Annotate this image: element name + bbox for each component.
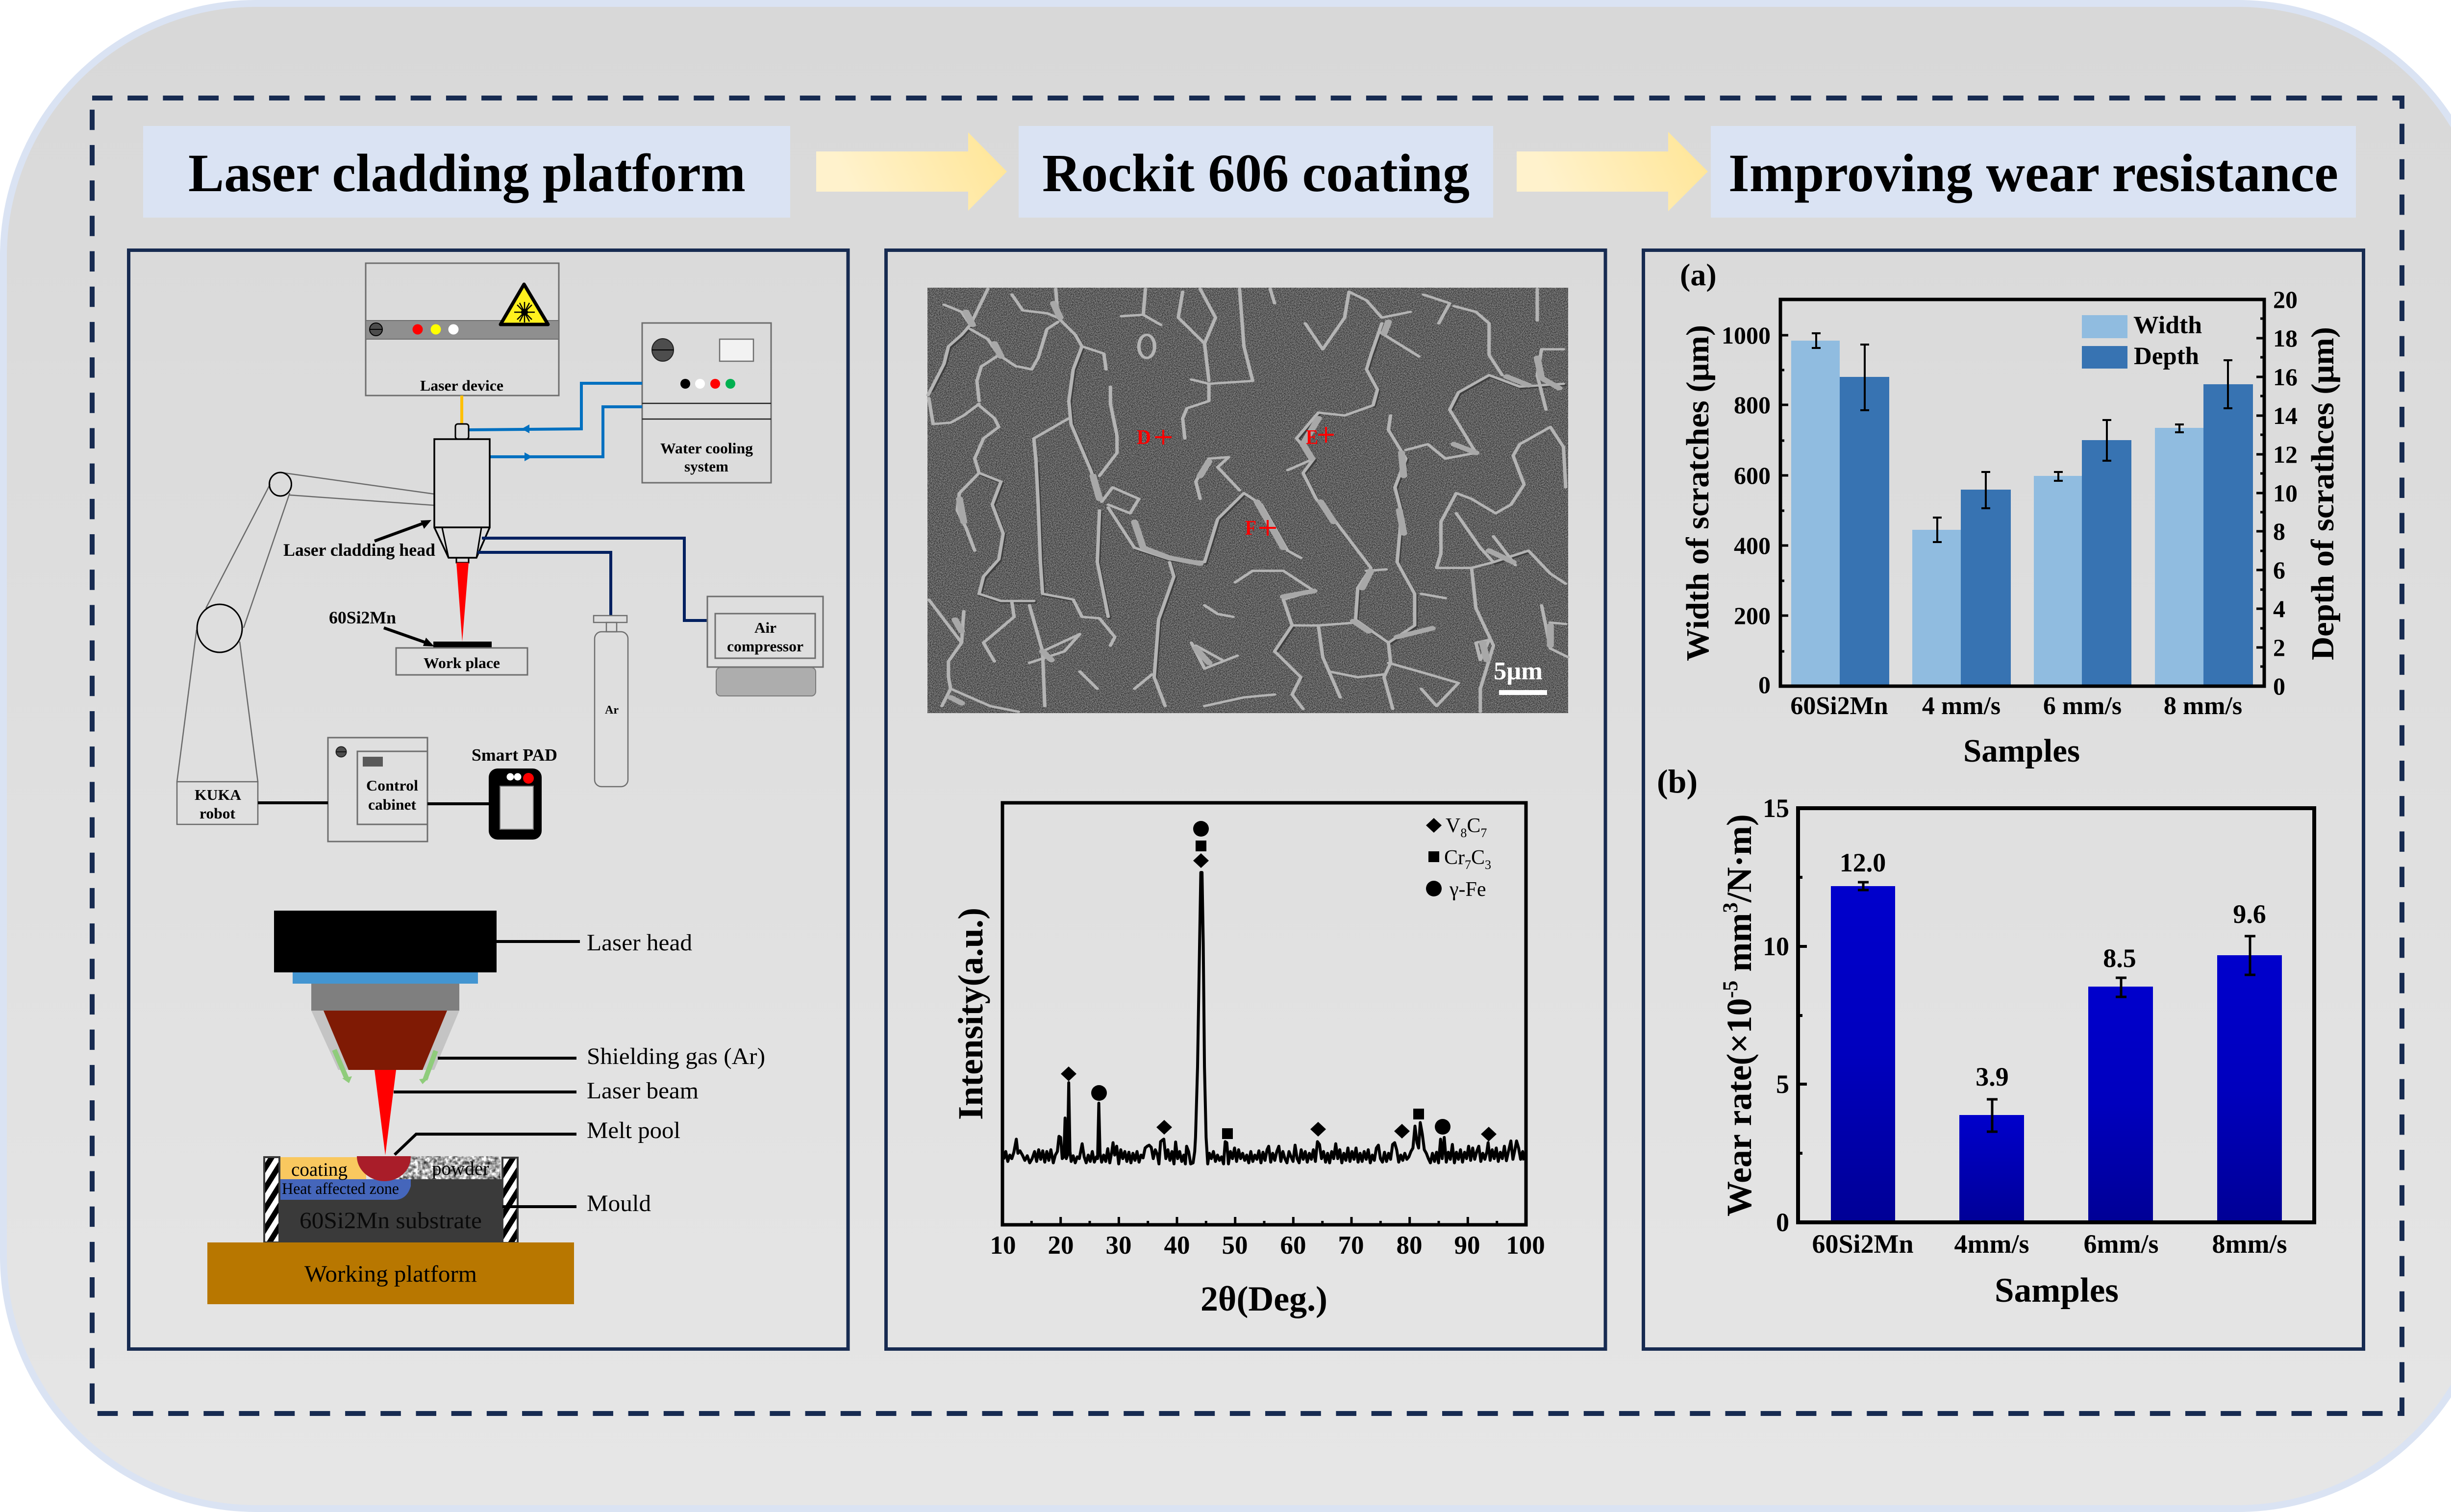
control cabinet: cabinet	[368, 796, 417, 813]
laser cladding head	[434, 424, 490, 642]
chart a right axis numbers: 6	[2273, 556, 2285, 584]
work place: Work place	[424, 654, 500, 671]
chart a right axis numbers: 0	[2273, 672, 2285, 700]
XRD axis labels	[990, 1231, 1545, 1260]
point markers D E F	[1137, 426, 1334, 540]
XRD axis labels: 50	[1222, 1231, 1248, 1260]
heading: Improving wear resistance	[1711, 126, 2356, 218]
XRD legend	[1426, 815, 1491, 901]
XRD legend: 3	[1485, 858, 1491, 872]
substrate and coating layers	[280, 1156, 501, 1242]
smart pad: Smart PAD	[472, 745, 557, 765]
working platform: Working platform	[304, 1261, 477, 1287]
XRD axis labels: 30	[1106, 1231, 1131, 1260]
chart a left axis numbers: 800	[1734, 391, 1771, 419]
chart b category labels: 60Si2Mn	[1812, 1229, 1914, 1259]
chart b axis numbers	[1763, 793, 1789, 1237]
air compressor: Air	[754, 619, 776, 636]
error bars	[1812, 333, 2232, 542]
air compressor: compressor	[727, 638, 803, 655]
point markers D E F: E	[1306, 426, 1318, 449]
argon cylinder	[594, 616, 628, 787]
chart b value labels: 9.6	[2233, 899, 2266, 929]
gas lines	[477, 538, 707, 620]
chart a: scratch width and depth: (a)	[1680, 257, 1717, 292]
chart a legend	[2082, 312, 2202, 370]
SEM micrograph	[927, 288, 1568, 713]
chart a category labels: 8 mm/s	[2164, 692, 2242, 720]
XRD axis labels: 70	[1338, 1231, 1364, 1260]
chart b category labels: 6mm/s	[2084, 1229, 2158, 1259]
smart pad	[472, 745, 557, 840]
substrate and coating layers: powder	[432, 1158, 489, 1179]
chart a left axis title: Width of scratches (μm)	[1680, 325, 1716, 661]
XRD legend: C	[1471, 846, 1485, 869]
control cabinet	[328, 738, 427, 842]
chart a right axis numbers: 16	[2273, 363, 2298, 391]
chart b axis numbers: 10	[1763, 932, 1789, 961]
panel: Rockit 606 coating	[886, 250, 1605, 1349]
chart a right axis numbers: 8	[2273, 518, 2285, 545]
XRD axis labels: 100	[1506, 1231, 1545, 1260]
point markers D E F: F	[1245, 517, 1256, 540]
chart a category labels: 60Si2Mn	[1790, 692, 1888, 720]
chart b category labels: 4mm/s	[1954, 1229, 2029, 1259]
heading: Laser cladding platform	[143, 126, 790, 218]
laser device	[366, 263, 559, 396]
chart a legend: Depth	[2134, 343, 2199, 370]
water cooling system	[642, 323, 771, 483]
chart b axis numbers: 0	[1776, 1208, 1789, 1237]
chart a left axis numbers: 600	[1734, 462, 1771, 489]
point markers D E F: D	[1137, 426, 1151, 449]
shielding gas arrows	[334, 1050, 436, 1084]
wear rate error bars	[1858, 882, 2255, 1132]
chart b value labels: 3.9	[1976, 1062, 2009, 1091]
chart b x axis title: Samples	[1995, 1271, 2119, 1310]
mould walls	[264, 1157, 518, 1243]
XRD trace	[1004, 872, 1524, 1164]
chart a right axis numbers: 14	[2273, 402, 2298, 429]
chart a ticks	[1780, 319, 2264, 667]
XRD phase markers	[1061, 821, 1497, 1141]
callout lines and labels: Mould	[587, 1190, 651, 1216]
laser device: Laser device	[420, 377, 503, 394]
KUKA robot arm	[177, 472, 434, 824]
chart b: wear rate	[1657, 763, 2314, 1310]
water cooling system: system	[684, 458, 728, 475]
chart a right axis numbers: 10	[2273, 479, 2298, 507]
chart a: scratch width and depth	[1680, 257, 2341, 769]
XRD axis labels: 10	[990, 1231, 1016, 1260]
air compressor	[707, 596, 823, 696]
arrow: platform to coating	[816, 132, 1007, 211]
chart b category labels: 8mm/s	[2212, 1229, 2287, 1259]
argon cylinder: Ar	[605, 704, 619, 717]
XRD legend: V	[1446, 815, 1460, 837]
panel: laser cladding platform	[128, 250, 848, 1349]
robot and pad cables	[258, 803, 489, 804]
chart b: wear rate: (b)	[1657, 763, 1698, 800]
chart b y axis title: Wear rate(×10	[1720, 998, 1759, 1216]
XRD chart	[951, 803, 1545, 1318]
KUKA robot arm: robot	[200, 805, 236, 822]
XRD axis labels: 20	[1048, 1231, 1074, 1260]
XRD axis labels: 60	[1280, 1231, 1306, 1260]
XRD legend: γ-Fe	[1449, 878, 1486, 901]
width bars	[1791, 341, 2203, 685]
XRD legend: 8	[1460, 826, 1467, 840]
fibre link from laser to head	[460, 396, 463, 424]
XRD legend: Cr	[1444, 846, 1465, 869]
callout lines and labels: Melt pool	[587, 1117, 680, 1143]
depth bars	[1840, 377, 2253, 685]
callout lines and labels: Laser head	[587, 930, 692, 956]
chart b value labels: 8.5	[2103, 943, 2136, 973]
chart a right axis numbers: 20	[2273, 286, 2298, 313]
chart b y axis title: -5	[1719, 981, 1742, 998]
XRD tick marks	[1031, 1217, 1497, 1224]
panel: wear resistance	[1643, 250, 2364, 1349]
chart a legend: Width	[2133, 312, 2202, 339]
label: laser cladding head	[283, 520, 435, 560]
label: 60Si2Mn workpiece	[329, 608, 434, 646]
chart b y axis title: 3	[1719, 902, 1742, 913]
chart a left axis numbers: 1000	[1722, 322, 1771, 349]
XRD legend: 7	[1465, 858, 1471, 872]
callout lines and labels	[394, 930, 765, 1216]
laser head stack	[274, 911, 497, 1070]
chart a category labels: 6 mm/s	[2043, 692, 2122, 720]
chart a x axis title: Samples	[1963, 733, 2080, 769]
chart a left axis numbers: 400	[1734, 532, 1771, 559]
substrate and coating layers: Heat affected zone	[282, 1180, 399, 1198]
XRD axis labels: 40	[1164, 1231, 1190, 1260]
arrow: coating to wear resistance	[1517, 132, 1708, 211]
chart a left axis numbers: 200	[1734, 602, 1771, 629]
XRD axis labels: 80	[1396, 1231, 1423, 1260]
wear rate bars	[1831, 886, 2282, 1220]
chart a right axis numbers: 4	[2273, 595, 2285, 622]
chart b value labels: 12.0	[1840, 848, 1886, 877]
cooling water pipes	[469, 383, 642, 461]
scale bar	[1494, 657, 1547, 695]
chart a right axis title: Depth of scrathces (μm)	[2305, 327, 2341, 660]
chart b ticks	[1798, 877, 1807, 1153]
heading: Improving wear resistance: Improving wear resistance	[1728, 143, 2338, 203]
KUKA robot arm: KUKA	[195, 786, 242, 803]
XRD legend: C	[1467, 815, 1480, 837]
chart a right axis numbers	[2273, 286, 2298, 700]
substrate and coating layers: 60Si2Mn substrate	[300, 1208, 482, 1234]
work place	[396, 642, 527, 675]
control cabinet: Control	[366, 777, 418, 794]
chart b axis numbers: 5	[1776, 1069, 1789, 1099]
XRD axis labels: 90	[1454, 1231, 1480, 1260]
callout lines and labels: Laser beam	[587, 1078, 699, 1104]
heading: Laser cladding platform: Laser cladding platform	[188, 143, 746, 203]
water cooling system: Water cooling	[660, 440, 753, 457]
chart a right axis numbers: 18	[2273, 324, 2298, 352]
heading: Rockit 606 coating: Rockit 606 coating	[1042, 143, 1470, 203]
substrate and coating layers: coating	[291, 1159, 348, 1180]
heading: Rockit 606 coating	[1019, 126, 1493, 218]
chart a left axis numbers	[1722, 322, 1771, 698]
XRD x axis title: 2θ(Deg.)	[1200, 1279, 1327, 1318]
chart b y axis title: mm	[1720, 913, 1759, 981]
chart a right axis numbers: 2	[2273, 634, 2285, 661]
working platform	[207, 1242, 574, 1304]
chart b category labels	[1812, 1229, 2287, 1259]
chart a category labels: 4 mm/s	[1922, 692, 2001, 720]
chart a left axis numbers: 0	[1758, 671, 1771, 698]
laser beam	[375, 1070, 396, 1155]
chart b axis numbers: 15	[1763, 793, 1789, 823]
label: laser cladding head: Laser cladding head	[283, 540, 435, 560]
chart a category labels	[1790, 692, 2242, 720]
XRD legend: 7	[1480, 826, 1487, 840]
callout lines and labels: Shielding gas (Ar)	[587, 1043, 765, 1069]
chart b y axis title: /N·m)	[1720, 814, 1759, 903]
scale bar: 5μm	[1494, 657, 1543, 685]
XRD y axis title: Intensity(a.u.)	[951, 908, 990, 1120]
chart b value labels	[1840, 848, 2266, 1091]
chart a right axis numbers: 12	[2273, 441, 2298, 468]
label: 60Si2Mn workpiece: 60Si2Mn	[329, 608, 396, 627]
